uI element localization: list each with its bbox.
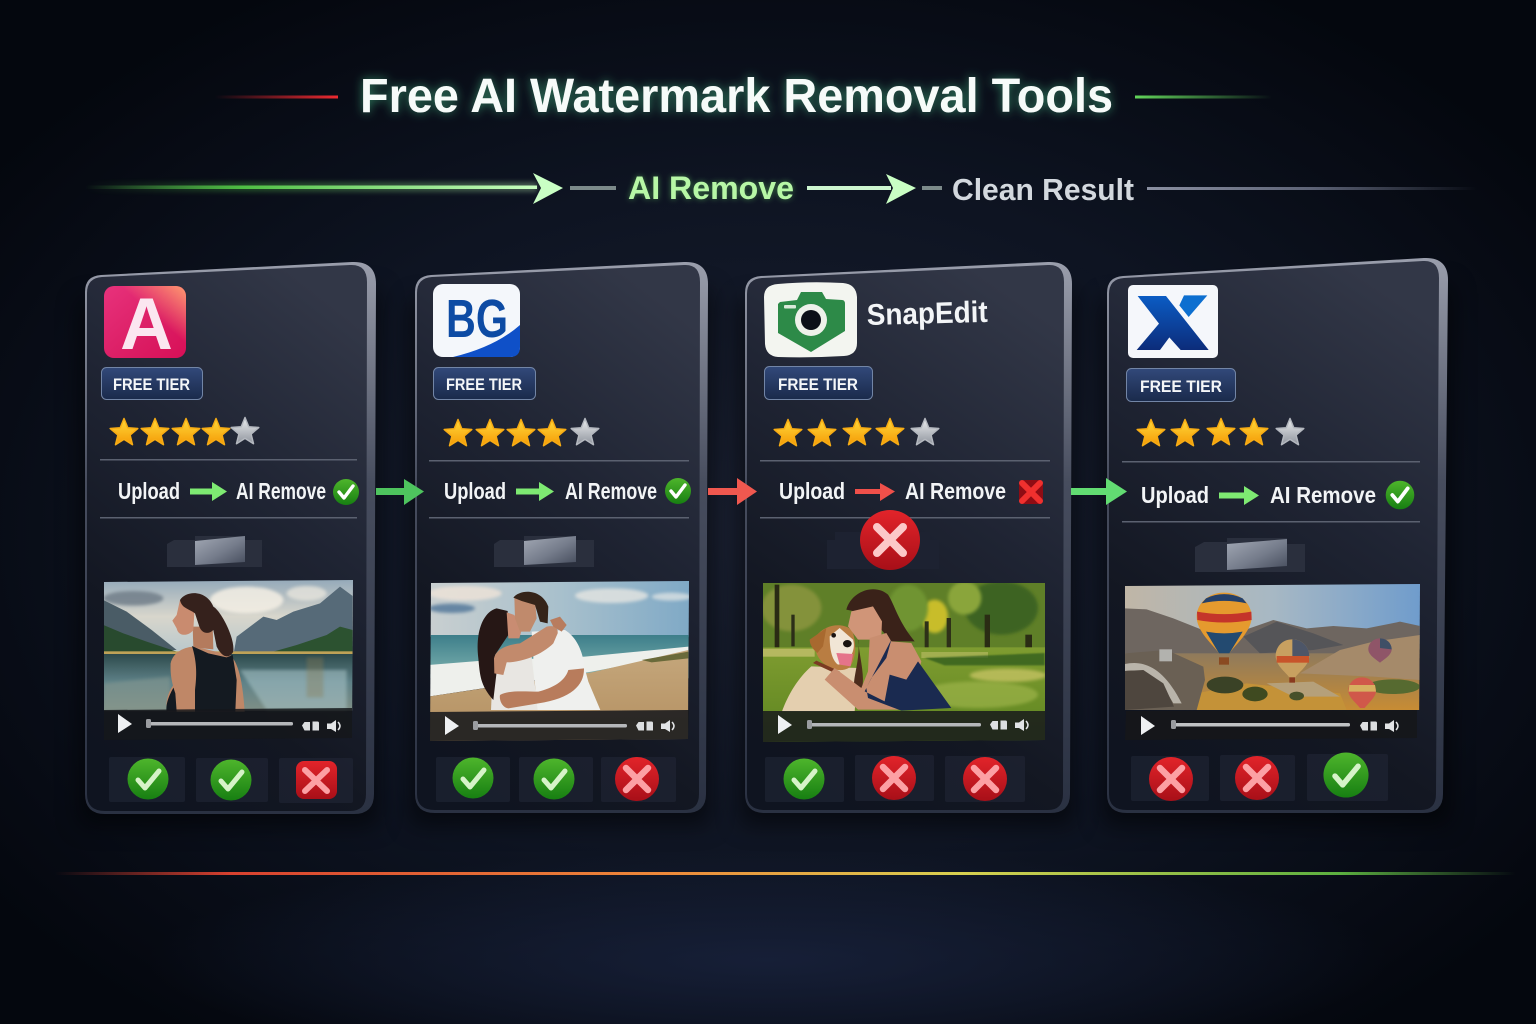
icon: watermark patch xyxy=(1195,538,1305,572)
label: AI Remove: AI Remove xyxy=(628,170,794,206)
icon: BG logo: BG xyxy=(446,289,508,349)
video: woman with dog xyxy=(761,581,1048,744)
step: upload to AI remove xyxy=(118,478,359,505)
video controls xyxy=(763,711,1045,742)
icon: watermark patch xyxy=(167,536,262,567)
arrow: card 3 to card 4 xyxy=(1071,478,1127,505)
panel: card 1, A tool xyxy=(80,262,380,825)
icon: X logo xyxy=(1128,285,1218,358)
balloon medium xyxy=(1276,639,1309,683)
step: upload to AI remove, failed: AI Remove xyxy=(905,478,1006,504)
panel: card 2, BG tool xyxy=(410,262,712,825)
title: Free AI Watermark Removal Tools xyxy=(360,70,1113,123)
label: Clean Result: Clean Result xyxy=(952,172,1134,207)
status icons xyxy=(1131,752,1388,801)
badge: free tier xyxy=(102,368,202,400)
arrow: card 2 to card 3, red xyxy=(708,478,757,505)
label: SnapEdit: SnapEdit xyxy=(866,296,988,332)
arrow: incoming green line xyxy=(85,173,563,204)
dog xyxy=(782,625,858,711)
woman xyxy=(825,589,951,711)
video controls xyxy=(104,708,352,740)
badge: free tier xyxy=(764,366,872,400)
panel: card 3, SnapEdit xyxy=(740,262,1076,825)
rating stars xyxy=(110,418,259,445)
step: upload to AI remove: Upload xyxy=(444,478,506,504)
step: upload to AI remove: AI Remove xyxy=(1270,482,1376,508)
rating stars xyxy=(444,418,599,446)
balloon far right xyxy=(1368,638,1392,663)
step: upload to AI remove: AI Remove xyxy=(565,478,657,504)
status icons xyxy=(109,757,353,803)
arrow: second green arrow xyxy=(807,174,916,204)
arrow: card 1 to card 2 xyxy=(376,479,424,505)
step: upload to AI remove: Upload xyxy=(1141,482,1209,508)
step: upload to AI remove: Upload xyxy=(118,478,180,504)
badge: free tier xyxy=(1126,368,1236,402)
step: upload to AI remove xyxy=(444,478,691,504)
badge: free tier: FREE TIER xyxy=(113,375,190,394)
balloon low xyxy=(1348,677,1376,708)
icon: BG logo xyxy=(433,284,520,357)
bottom gradient divider xyxy=(55,872,1515,875)
step: upload to AI remove: AI Remove xyxy=(236,478,326,504)
badge: free tier: FREE TIER xyxy=(1140,377,1222,396)
status icons xyxy=(765,755,1025,802)
video controls xyxy=(1125,710,1417,740)
step: upload to AI remove, failed xyxy=(779,478,1043,504)
badge: free tier: FREE TIER xyxy=(778,375,858,394)
couple figure xyxy=(478,592,600,710)
balloon large xyxy=(1197,593,1252,665)
badge: free tier: FREE TIER xyxy=(446,375,522,394)
step: upload to AI remove, failed: Upload xyxy=(779,478,845,504)
video: hot air balloons xyxy=(1123,583,1422,740)
rating stars xyxy=(1137,418,1304,446)
video: woman at lake xyxy=(100,577,357,740)
process flow header: AI Remove to Clean Result xyxy=(85,170,1477,207)
rating stars xyxy=(774,418,939,446)
badge: free tier xyxy=(434,368,536,400)
status icons xyxy=(436,757,676,802)
panel: card 4, X tool xyxy=(1102,258,1452,825)
stone bridge and town xyxy=(1125,649,1205,710)
icon: watermark patch xyxy=(494,536,594,567)
step: upload to AI remove xyxy=(1141,481,1414,509)
video controls xyxy=(430,710,689,741)
icon: A logo xyxy=(104,284,186,365)
icon: SnapEdit camera logo xyxy=(764,282,857,357)
video: couple on beach xyxy=(428,580,692,742)
icon: blocked watermark patch xyxy=(827,510,939,570)
icon: A logo: A xyxy=(120,284,173,365)
woman figure xyxy=(166,593,245,712)
